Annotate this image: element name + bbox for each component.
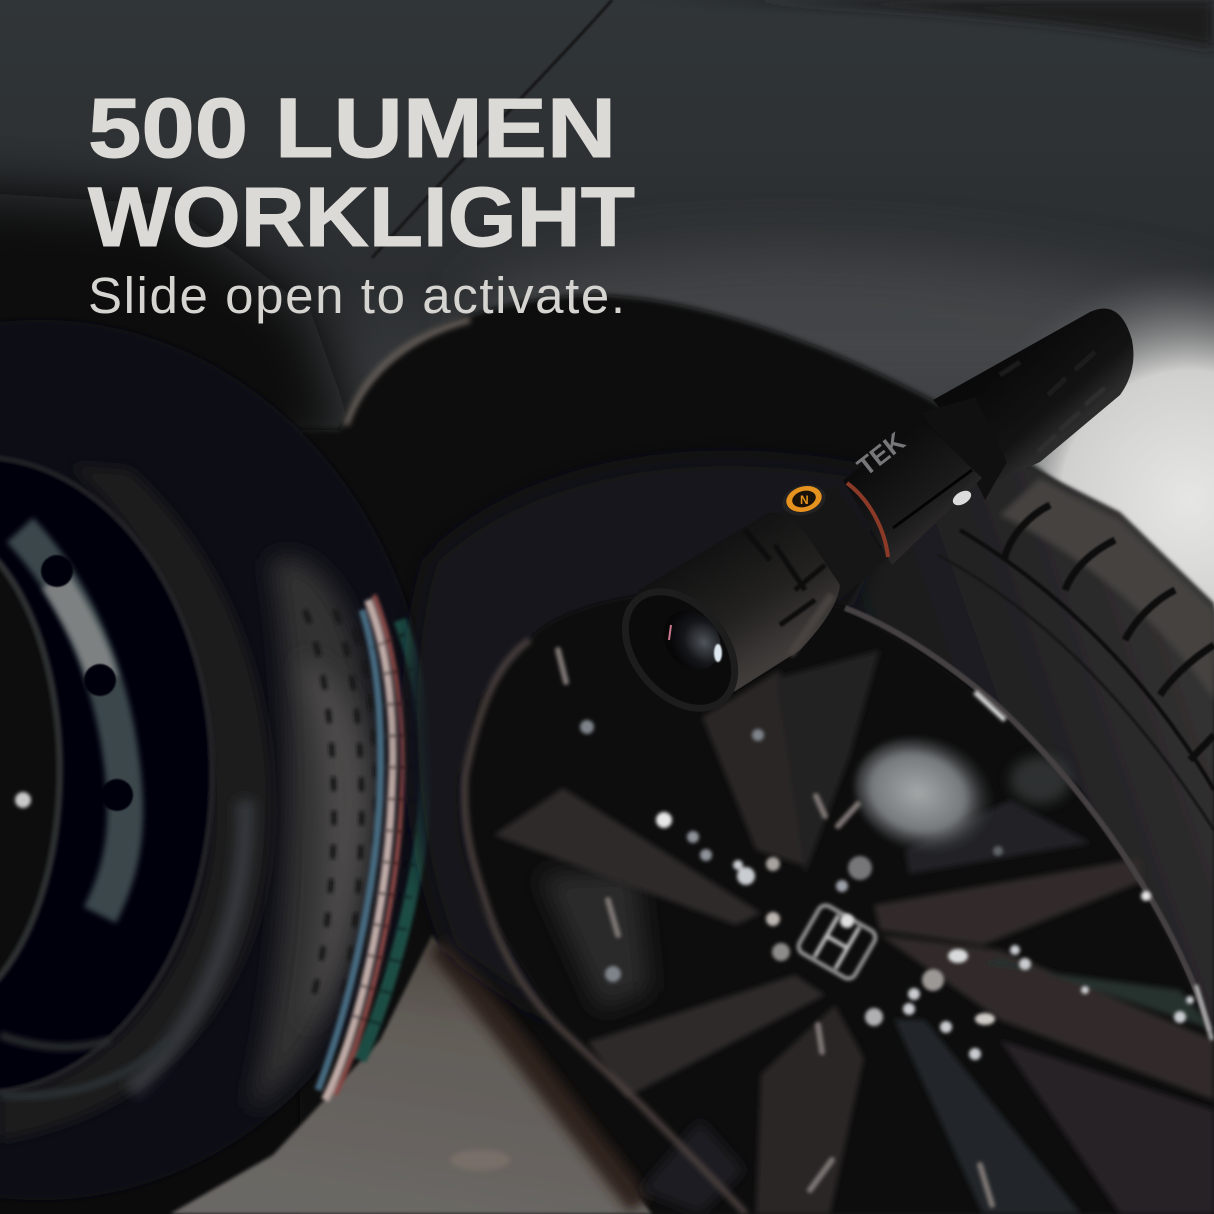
steel rim ring [20, 530, 125, 915]
slider slit [893, 470, 972, 528]
side light [950, 488, 974, 508]
brake disc [839, 719, 1011, 871]
zoom head [622, 513, 840, 707]
alloy rim [464, 591, 1214, 1214]
bokeh dashes [558, 650, 992, 1205]
ground [170, 935, 652, 1214]
red ring [847, 483, 888, 557]
left tyre sidewall [0, 465, 271, 1140]
heading [87, 81, 635, 264]
tread blocks [1000, 478, 1214, 700]
left tyre tread [250, 557, 378, 1110]
subheading: Slide open to activate. [88, 267, 627, 324]
heading: 500 LUMEN [88, 81, 616, 175]
heading: WORKLIGHT [88, 170, 635, 264]
left tyre and steel wheel [0, 320, 432, 1200]
car body panel [0, 0, 1214, 520]
wheel well [300, 295, 1214, 1214]
hub emblem [796, 903, 878, 981]
tail handle [933, 308, 1134, 480]
lit wheel arch at right [930, 260, 1214, 730]
right tyre [410, 455, 1214, 1050]
steel rim holes [41, 555, 133, 811]
rim lip [464, 640, 746, 1214]
bezel and lens [603, 571, 757, 729]
wet highlights [580, 720, 1194, 1060]
steel rim recess [0, 457, 212, 1093]
inner dark barrel shapes [539, 870, 650, 1010]
caliper shadow [1010, 756, 1070, 804]
inner hub [0, 525, 60, 1015]
rim highlights [975, 692, 1005, 720]
neck [780, 485, 888, 600]
spokes [494, 650, 1214, 1214]
flashlight [603, 308, 1134, 729]
dark left portion of tyre [410, 458, 900, 1031]
rim interior [467, 591, 1214, 1214]
icon: orange power button: N [800, 493, 809, 507]
colour stripes [318, 595, 426, 1100]
mid body [843, 420, 982, 565]
icon: orange power button [779, 480, 829, 520]
collar [921, 397, 1007, 500]
brand lettering: TEK [851, 426, 911, 482]
